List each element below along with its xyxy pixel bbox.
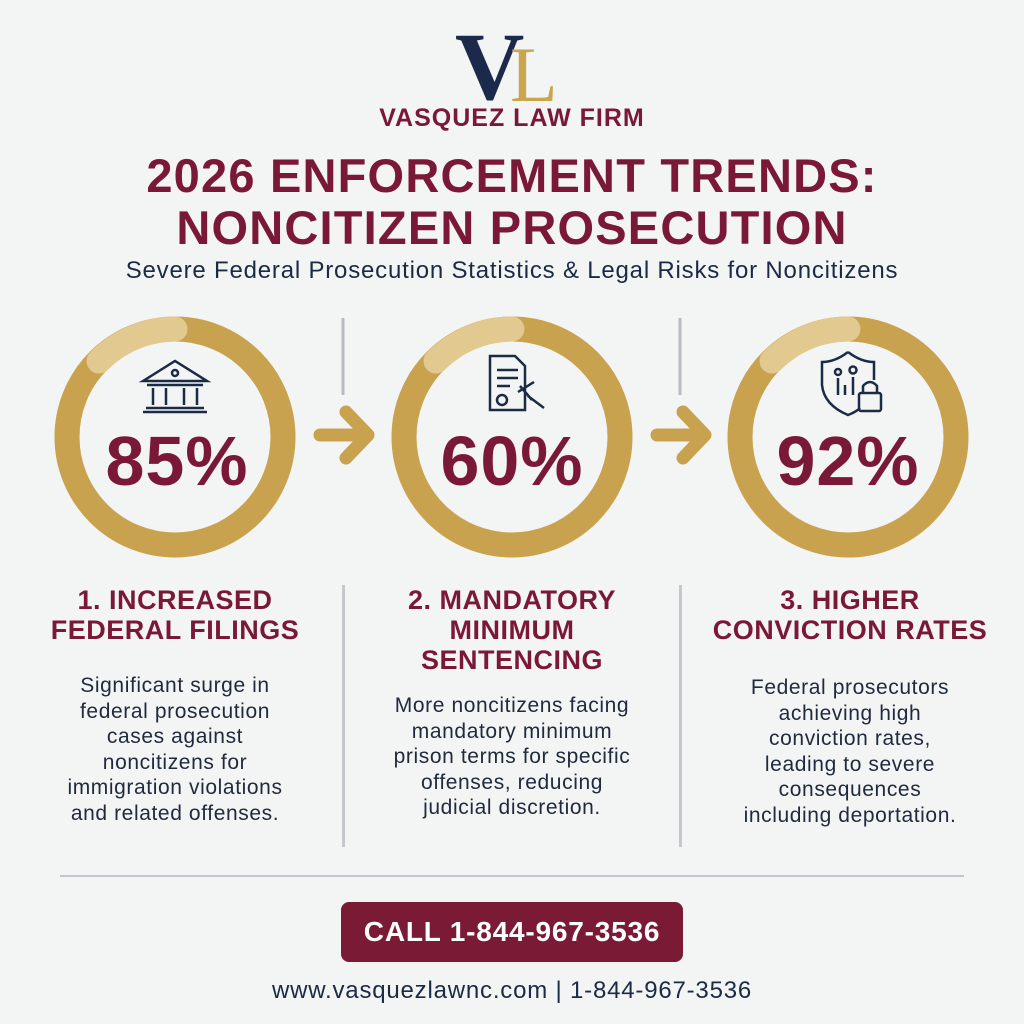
icon: document gavel [490,356,544,410]
panel 1: cases against [107,725,243,748]
panel 2: prison terms for specific [394,745,630,768]
panel 1: noncitizens for [103,750,247,774]
footer: www.vasquezlawnc.com | 1-844-967-3536 [272,977,752,1004]
panel 3: leading to severe [765,752,935,776]
panel 3: conviction rates, [769,727,931,750]
logo [455,15,558,105]
panel 1 [51,585,299,824]
panel 2: MINIMUM [450,615,574,645]
panel 1: 1. INCREASED [77,585,273,615]
icon: courthouse [143,361,207,412]
rings and arrows: 60% [440,422,584,500]
panel 3: CONVICTION RATES [713,615,987,645]
panel 2 [394,585,630,819]
panel 3: achieving high [779,702,921,724]
firm name: VASQUEZ LAW FIRM [379,104,645,132]
panel 1: immigration violations [67,776,283,799]
panel 3: consequences [779,778,921,801]
panel 2: mandatory minimum [412,720,612,742]
panel 1: and related offenses. [71,802,279,824]
panel 3 [713,585,987,826]
title: 2026 ENFORCEMENT TRENDS: [146,149,878,202]
title [146,149,878,254]
rings and arrows: 92% [776,422,920,500]
rings and arrows [54,316,968,558]
panel 2: More noncitizens facing [395,694,629,717]
divider line [60,875,964,877]
icon: shield family lock [822,352,881,415]
panel 3: 3. HIGHER [780,585,920,615]
subtitle: Severe Federal Prosecution Statistics & Legal Risks for Noncitizens [126,257,898,284]
panel 2: SENTENCING [421,645,603,675]
panel 3: including deportation. [744,804,956,826]
panel 2: 2. MANDATORY [408,585,616,615]
panel 1: FEDERAL FILINGS [51,615,299,645]
panel 1: federal prosecution [80,700,270,722]
rings and arrows: 85% [105,422,249,500]
panel 2: judicial discretion. [423,796,601,819]
panel 3: Federal prosecutors [751,676,949,699]
panel 1: Significant surge in [80,674,270,697]
call button: CALL 1-844-967-3536 [364,916,660,947]
call button [341,902,683,962]
panel 2: offenses, reducing [421,770,603,794]
title: NONCITIZEN PROSECUTION [176,201,848,254]
column dividers [342,585,345,847]
